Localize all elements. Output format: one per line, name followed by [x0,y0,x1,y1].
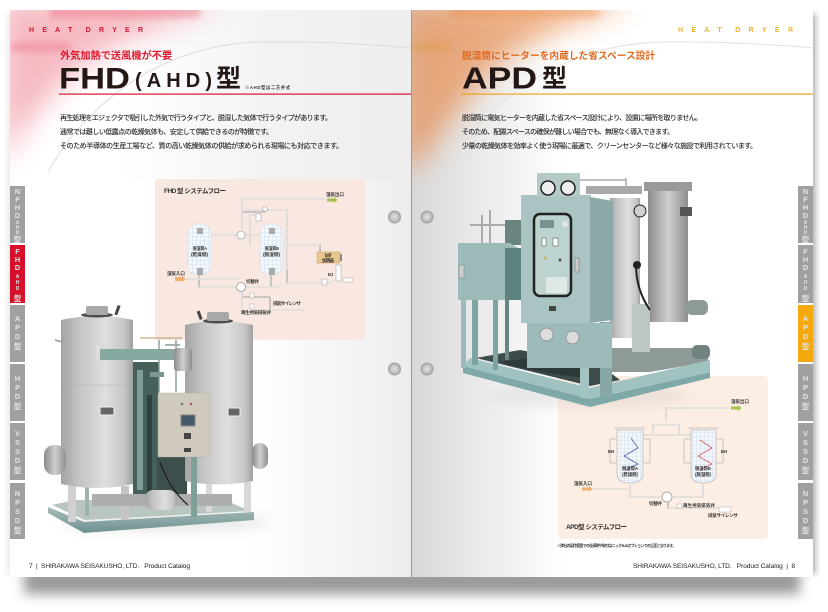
tab: VSSD: 型 [14,465,22,475]
flow labels: EH [721,449,728,454]
outlet arrow [731,405,742,411]
horizontal pipe [92,494,232,506]
tab: FHD(AHD) active: 型 [14,293,22,303]
central dark piping [133,362,159,502]
flow labels: EJ [328,272,333,277]
tab: HPD: P [803,383,808,392]
gauge box [537,173,580,197]
tab: VSSD: V [15,429,20,438]
tank A [188,224,211,275]
control box [158,393,210,457]
text block: right body [462,113,757,150]
text block: right body: 脱湿筒に電気ヒーターを内蔵した省スペース設計により、設置に場所を取りません。 [462,113,702,122]
title: APD 型: 型 [542,65,567,93]
tab: APD [10,305,25,362]
heater tank 1: (乾燥側) [622,471,638,478]
tab: NFHD(AHD) [10,186,25,244]
heater tank 2: 脱湿筒B [695,465,712,472]
panel: right page [400,0,813,577]
tab: NFHD(AHD): D [15,211,21,220]
navigation tabs: left [10,186,25,539]
tab: VSSD: D [15,456,21,465]
tab: FHD(AHD) [798,245,813,303]
flow labels: 湿気出口 [326,191,344,198]
control cabinet [521,195,613,368]
text block: left body [60,113,343,150]
outlet arrow [327,197,338,203]
tab: APD active: D [803,332,809,341]
flow labels: 切替弁 [649,500,662,507]
flow labels: 再生用気排気弁 [241,309,271,316]
tank A: 脱湿筒A [193,245,208,252]
flow piping [593,408,731,512]
tab: HPD: H [15,374,20,383]
tab: FHD(AHD): D [803,263,809,272]
tab: NPSD: N [15,489,20,498]
tab: NFHD(AHD): D [16,230,20,236]
heater: 加熱器 [322,257,334,264]
subtitle: FHD: 外気加熱で送風機が不要 [60,49,172,62]
tab: APD active: A [803,314,809,323]
tab: FHD(AHD) active: H [15,255,20,264]
tab: APD: P [15,323,20,332]
title: FHD (AHD) 型: FHD [59,62,130,96]
tab: FHD(AHD): 型 [802,293,810,303]
subtitle: APD: 脱湿筒にヒーターを内蔵した省スペース設計 [462,50,655,62]
footer right: SHIRAKAWA SEISAKUSHO, LTD. Product Catalog | 8 [633,563,795,570]
tab: HPD: P [15,383,20,392]
text block: right body: そのため、配置スペースの確保が難しい場合でも、無理なく導入できます。 [462,127,674,136]
panel: left page [0,0,411,577]
heater tank 2 [688,428,719,483]
tab: VSSD: 型 [802,465,810,475]
tab: FHD(AHD) active: D [15,263,21,272]
tab: NPSD: S [15,507,20,516]
tab: APD: 型 [14,341,22,351]
flow labels: 湿気入口 [167,270,185,277]
tab: VSSD: V [803,429,808,438]
tab: APD active: P [803,323,808,332]
text block: right body: 少量の乾燥気体を効率よく使う現場に最適で、クリーンセンターなど様々な施設で利用されています。 [462,141,757,150]
tab: NFHD(AHD) [798,186,813,244]
tab: NFHD(AHD): F [15,195,20,204]
flow labels: EH [608,449,615,454]
tab: APD active [798,305,813,362]
flow labels: 排気サイレンサ [273,300,301,307]
tab: NFHD(AHD): N [803,187,808,196]
tab: NFHD(AHD): 型 [14,234,22,244]
tab: VSSD: S [15,438,20,447]
tab: HPD: 型 [14,401,22,411]
pipes under [500,358,585,378]
tank B: (脱湿側) [263,251,280,258]
inlet arrow [582,486,592,492]
photo: APD machine [458,173,710,407]
heater tank 2: (脱湿側) [695,471,711,478]
flow labels: 湿気出口 [731,398,749,405]
tab: NPSD: 型 [802,525,810,535]
tab: NPSD: D [803,516,809,525]
label: HEAT DRYER right: H E A T D R Y E R [678,27,793,34]
tank B [260,224,283,275]
binder holes [388,210,434,376]
heater: ヒータ [324,252,332,259]
tab: NFHD(AHD): F [803,195,808,204]
tank A: (乾燥側) [191,251,208,258]
tab: NFHD(AHD): H [804,225,808,231]
tab: NFHD(AHD): H [803,203,808,212]
tab: FHD(AHD) active: F [15,247,20,256]
tab: FHD(AHD): H [804,280,808,286]
tank B: 脱湿筒B [265,245,280,252]
text block: left body: 通常では難しい低露点の乾燥気体も、安定して供給できるのが特徴です。 [60,127,273,136]
flow labels: 再生用気排気弁 [683,502,715,509]
title: APD 型 [462,60,567,96]
tab: HPD [798,364,813,421]
tab: NFHD(AHD): 型 [802,234,810,244]
tab: NPSD: P [15,498,20,507]
tab: FHD(AHD): H [803,255,808,264]
spine line [411,10,412,577]
tab: APD active: 型 [802,341,810,351]
tab: FHD(AHD): F [803,247,808,256]
tab: FHD(AHD): D [804,286,808,292]
tab: VSSD: S [15,447,20,456]
base frame [463,366,710,407]
tab: VSSD: S [803,438,808,447]
title: FHD (AHD) 型: (AHD) [135,70,212,92]
tab: NPSD [798,483,813,539]
tab: NPSD [10,483,25,539]
title: FHD (AHD) 型 [59,62,291,96]
tab: NPSD: S [803,507,808,516]
tab: VSSD: D [803,456,809,465]
tab: NFHD(AHD): A [804,220,808,226]
flow labels: 湿気入口 [574,480,592,487]
interior pipes [612,348,708,372]
title rule right [461,94,813,95]
tab: APD: D [15,332,21,341]
tab: NPSD: N [803,489,808,498]
tab: NFHD(AHD): H [15,203,20,212]
tab: APD: A [15,314,21,323]
heater [317,252,342,264]
label: HEAT DRYER left: H E A T D R Y E R [29,27,143,34]
flow labels: 切替弁 [246,278,259,285]
heading: FHD flow: FHD 型 システムフロー [164,186,226,195]
inlet arrow [175,276,186,282]
legs [68,486,76,522]
footnote: ※弊社の製作範囲での仕様例や取付はニックSUSオプションでの公差となります。 [557,543,676,548]
tab: NFHD(AHD): H [16,225,20,231]
tanks [648,190,688,322]
title: FHD (AHD) 型: 型 [216,65,241,93]
tab: FHD(AHD) active: A [16,274,20,280]
left cabinet [458,243,521,300]
photo: FHD machine [44,305,270,533]
tab: NFHD(AHD): A [16,220,20,226]
footer left: 7 | SHIRAKAWA SEISAKUSHO, LTD. Product Catalog [29,563,190,570]
tab: HPD: 型 [802,401,810,411]
tab: HPD [10,364,25,421]
right tank [185,311,268,484]
tab: NFHD(AHD): D [804,230,808,236]
title: APD 型: APD [462,60,537,96]
heater tank 1 [614,428,645,483]
cross pipe [96,345,192,371]
tab: HPD: D [803,392,809,401]
tab: HPD: D [15,392,21,401]
base frame [48,507,254,533]
navigation tabs: right [798,186,813,539]
tab: NFHD(AHD): D [803,211,809,220]
heading: APD flow: APD型 システムフロー [566,522,627,531]
panel: APD system flow [558,376,768,539]
flow labels [574,398,749,519]
tab: VSSD [10,423,25,480]
tab: HPD: H [803,374,808,383]
tab: FHD(AHD): A [804,274,808,280]
tab: VSSD: S [803,447,808,456]
tab: NPSD: P [803,498,808,507]
tab: NPSD: 型 [14,525,22,535]
panel below [527,323,612,368]
flow labels [167,191,344,316]
tab: NPSD: D [15,516,21,525]
left tank [44,305,133,488]
heater tank 1: 脱湿筒A [622,465,639,472]
tab: VSSD [798,423,813,480]
flow labels: 排気サイレンサ [708,512,738,519]
title rule left [59,94,411,95]
title: FHD (AHD) 型: ※AHD型は二方弁式 [245,84,291,91]
text block: left body: 再生処理をエジェクタで吸引した外気で行うタイプと、脱湿した気体で行うタイプがあります。 [60,113,332,122]
text block: left body: そのため半導体の生産工場など、質の高い乾燥気体の供給が求められる現場にも対応できます。 [60,141,343,150]
tab: FHD(AHD) active [10,245,25,303]
tab: NFHD(AHD): N [15,187,20,196]
tab: FHD(AHD) active: D [16,286,20,292]
tab: FHD(AHD) active: H [16,280,20,286]
flow piping [175,199,353,312]
panel: FHD system flow [155,179,365,340]
